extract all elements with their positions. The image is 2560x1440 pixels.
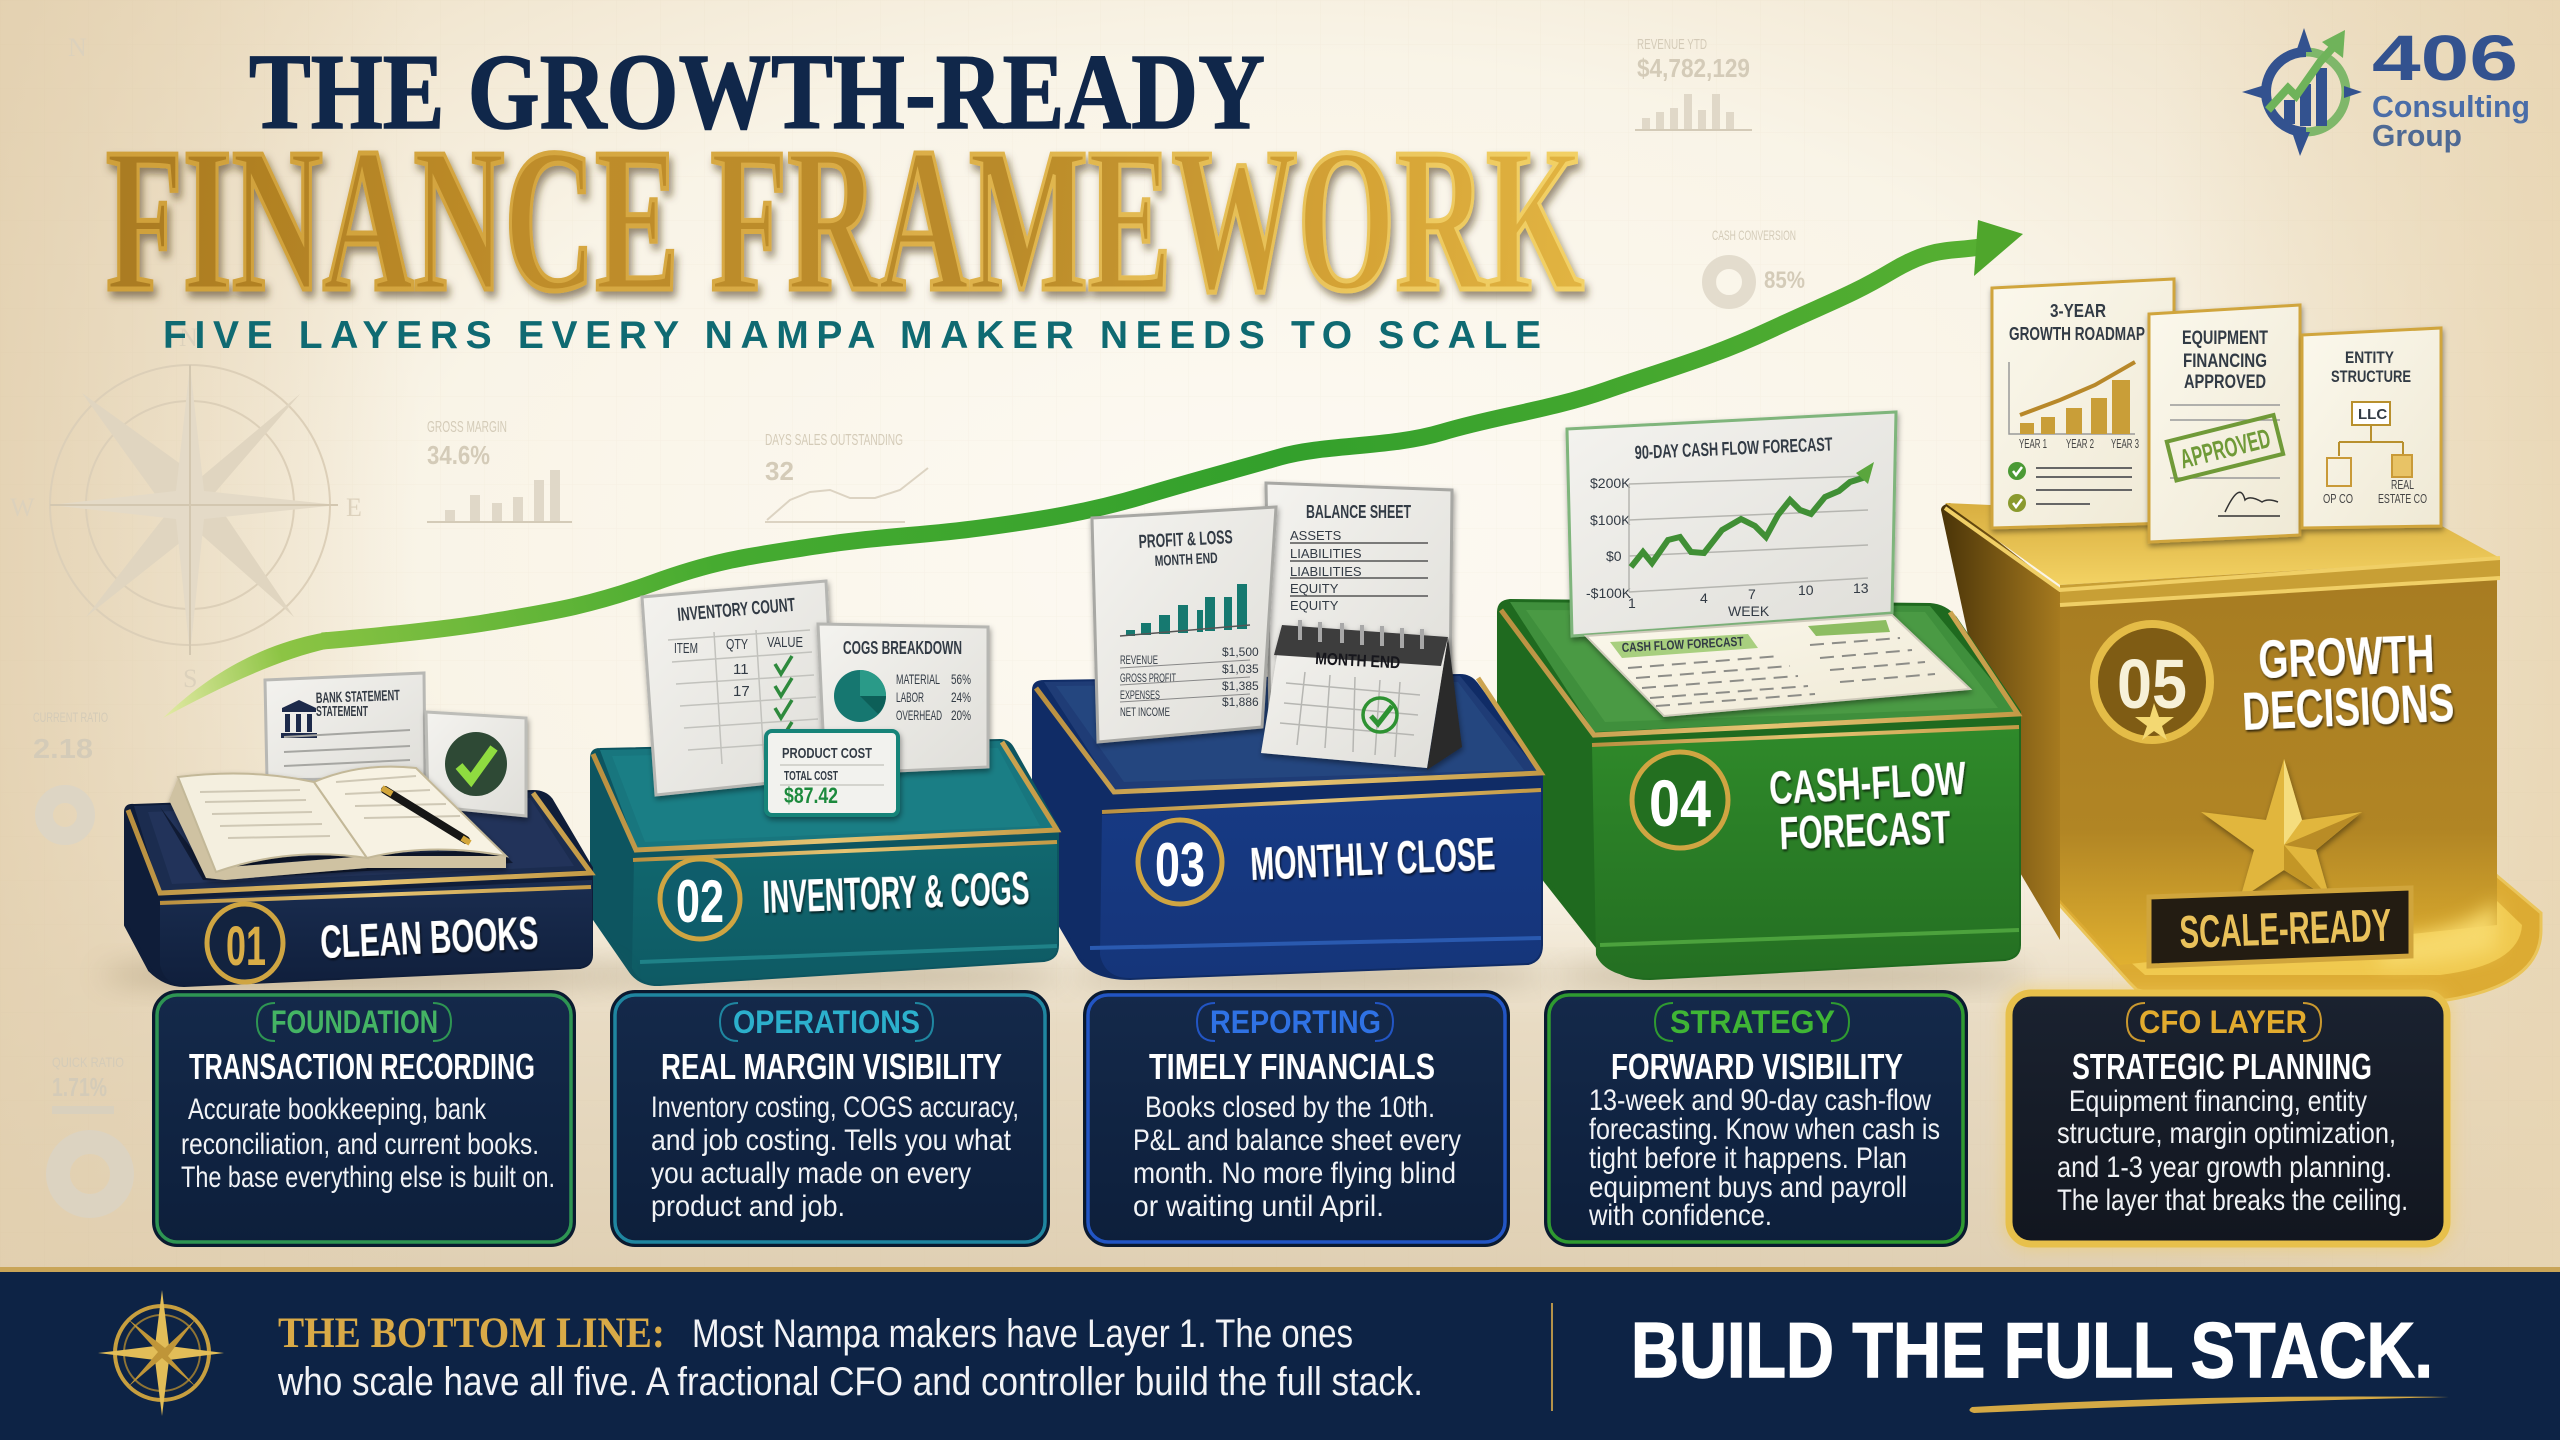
faint metric: cash conversion: [1709, 227, 1805, 302]
label: cash-flow forecast: CASH-FLOW: [1768, 752, 1968, 814]
heading: timely financials: TIMELY FINANCIALS: [1149, 1046, 1435, 1087]
card: cogs breakdown: 56%: [951, 671, 971, 687]
text block: strategy: [1588, 1084, 1940, 1232]
card: balance sheet: ASSETS: [1290, 528, 1342, 543]
icon: month-end calendar: MONTH END: [1315, 649, 1401, 672]
decorative compass rose: S: [183, 664, 197, 693]
icon: bank statement card: [265, 673, 425, 780]
layer 2 tin: inventory and cogs: [592, 581, 1065, 989]
decorative compass rose: N: [179, 323, 198, 352]
text block: operations: product and job.: [651, 1190, 845, 1223]
decorative compass rose: E: [346, 493, 362, 522]
badge 01: [207, 904, 283, 982]
tag: strategy: STRATEGY: [1670, 1004, 1835, 1040]
text block: cfo layer: The layer that breaks the ceiling.: [2057, 1184, 2408, 1217]
card: cogs breakdown: 24%: [951, 689, 971, 705]
faint metric: revenue ytd: REVENUE YTD: [1637, 36, 1707, 53]
text block: reporting: P&L and balance sheet every: [1133, 1124, 1461, 1157]
badge 05: [2094, 624, 2210, 740]
card: entity structure: STRUCTURE: [2331, 367, 2411, 386]
card: profit and loss: $1,886: [1222, 695, 1259, 709]
decorative compass rose: [10, 33, 362, 693]
card: profit and loss: $1,035: [1222, 662, 1259, 676]
icon: month-end calendar: [1261, 620, 1462, 770]
card: balance sheet: BALANCE SHEET: [1306, 502, 1411, 522]
text block: cfo layer: [2057, 1085, 2408, 1217]
heading: strategic planning: STRATEGIC PLANNING: [2072, 1046, 2372, 1087]
card: inventory count: [642, 581, 836, 795]
badge 02: 02: [676, 868, 724, 935]
text block: operations: and job costing. Tells you what: [651, 1124, 1012, 1157]
card: profit and loss: $1,500: [1222, 645, 1259, 659]
text block: strategy: with confidence.: [1588, 1199, 1772, 1232]
badge 03: [1138, 820, 1222, 904]
faint metric: gross margin: 34.6%: [427, 440, 490, 470]
tag: cfo layer: CFO LAYER: [2139, 1004, 2307, 1040]
faint metric: cash conversion: 85%: [1764, 267, 1805, 294]
card: 90-day cash flow forecast chart: 7: [1748, 586, 1756, 602]
icon: check tile: [426, 712, 526, 816]
badge 04: [1632, 752, 1728, 848]
logo: 406 Consulting Group: Consulting: [2372, 89, 2530, 124]
icon: gold compass: [98, 1290, 224, 1416]
growth arrow: [163, 220, 2023, 718]
icon: open ledger with pen: [169, 767, 506, 880]
faint metric: days sales outstanding: 32: [765, 456, 794, 486]
card: equipment financing approved: [2149, 305, 2300, 542]
plaque: scale-ready: [2149, 888, 2411, 966]
text block: cfo layer: Equipment financing, entity: [2069, 1085, 2367, 1118]
panel: operations card: [613, 993, 1047, 1244]
tag: operations: OPERATIONS: [733, 1004, 920, 1040]
panel: reporting card: [1086, 993, 1507, 1244]
card: entity structure: ENTITY: [2345, 348, 2395, 367]
decorative compass rose: N: [68, 33, 87, 62]
label: monthly close: MONTHLY CLOSE: [1249, 827, 1496, 890]
card: equipment financing approved: EQUIPMENT: [2182, 328, 2268, 349]
card: inventory count: 17: [733, 683, 750, 700]
card: inventory count: VALUE: [767, 634, 803, 651]
card: 90-day cash flow forecast chart: WEEK: [1728, 603, 1770, 619]
text block: foundation: Accurate bookkeeping, bank: [188, 1093, 487, 1126]
text block: foundation: The base everything else is built on.: [181, 1161, 555, 1194]
text block: operations: [651, 1091, 1019, 1223]
badge 02: [660, 859, 740, 939]
underline stroke: [1969, 1396, 2449, 1413]
faint metric: days sales outstanding: [765, 432, 928, 522]
text block: foundation: [181, 1093, 555, 1194]
faint metric: current ratio: CURRENT RATIO: [33, 709, 108, 725]
pedestal base: [2019, 860, 2541, 1000]
card: 90-day cash flow forecast chart: -$100K: [1586, 585, 1632, 601]
icon: bank statement card: STATEMENT: [316, 703, 368, 720]
card: cash flow forecast sheet: [1586, 615, 1970, 716]
title line 2: FINANCE FRAMEWORK: [106, 105, 1584, 334]
text block: operations: Inventory costing, COGS accuracy,: [651, 1091, 1019, 1124]
panel: strategy card: [1547, 993, 1965, 1244]
decorative compass rose: W: [10, 493, 35, 522]
card: entity structure: OP CO: [2323, 491, 2353, 506]
text: the bottom line: THE BOTTOM LINE:: [278, 1310, 665, 1357]
call to action: BUILD THE FULL STACK.: [1631, 1306, 2433, 1394]
icon: bank statement card: BANK STATEMENT: [316, 687, 400, 707]
panel: cfo layer card: [2005, 989, 2451, 1248]
faint metric: cash conversion: CASH CONVERSION: [1712, 227, 1796, 243]
label: clean books: CLEAN BOOKS: [319, 907, 539, 968]
card: 3-year growth roadmap: 3-YEAR: [2050, 301, 2106, 321]
faint metric: gross margin: GROSS MARGIN: [427, 419, 507, 436]
faint metric: current ratio: 2.18: [33, 733, 93, 764]
card: 3-year growth roadmap: YEAR 3: [2111, 436, 2139, 451]
card: 90-day cash flow forecast chart: $0: [1606, 548, 1622, 564]
faint metric: quick ratio: QUICK RATIO: [52, 1054, 124, 1070]
card: 90-day cash flow forecast chart: [1567, 412, 1896, 636]
text block: reporting: or waiting until April.: [1133, 1190, 1384, 1223]
card: inventory count: ITEM: [674, 640, 698, 657]
text: bottom line sentence one: Most Nampa makers have Layer 1. The ones: [692, 1312, 1353, 1356]
card: profit and loss: EXPENSES: [1120, 688, 1160, 702]
label: growth decisions: DECISIONS: [2241, 673, 2455, 742]
label: cash-flow forecast: [1768, 752, 1968, 859]
panel: bottom line band: [0, 1267, 2560, 1440]
label: cash-flow forecast: FORECAST: [1779, 801, 1951, 859]
panel: foundation card: [155, 993, 573, 1244]
card: inventory count: 11: [733, 661, 749, 678]
faint metric: current ratio: [33, 709, 108, 836]
tag: foundation: FOUNDATION: [271, 1004, 438, 1040]
card: profit and loss: MONTH END: [1154, 550, 1218, 570]
card: cogs breakdown: COGS BREAKDOWN: [843, 638, 962, 658]
card: 90-day cash flow forecast chart: 90-DAY CASH FLOW FORECAST: [1634, 434, 1833, 464]
label: growth decisions: [2241, 624, 2455, 742]
text block: cfo layer: structure, margin optimization,: [2057, 1117, 2396, 1150]
card: 3-year growth roadmap: [1992, 279, 2174, 528]
card: product cost: $87.42: [784, 783, 838, 808]
card: profit and loss: NET INCOME: [1120, 705, 1170, 719]
card: inventory count: QTY: [726, 636, 748, 653]
card: equipment financing approved: APPROVED: [2177, 423, 2273, 474]
logo: 406 Consulting Group: [2242, 22, 2530, 156]
faint metric: days sales outstanding: DAYS SALES OUTSTANDING: [765, 432, 903, 449]
card: 90-day cash flow forecast chart: 10: [1798, 582, 1814, 598]
card: balance sheet: EQUITY: [1290, 581, 1339, 596]
faint metric: revenue ytd: [1635, 36, 1752, 130]
card: entity structure: LLC: [2358, 406, 2387, 423]
heading: transaction recording: TRANSACTION RECORDING: [189, 1046, 535, 1087]
card: 90-day cash flow forecast chart: $100K: [1590, 512, 1631, 528]
badge 04: 04: [1649, 766, 1711, 840]
layer 4 tin: cash-flow forecast: [1499, 412, 2030, 989]
label: growth decisions: GROWTH: [2257, 624, 2435, 690]
text block: reporting: [1133, 1091, 1461, 1223]
card: balance sheet: LIABILITIES: [1290, 564, 1362, 579]
card: profit and loss: [1092, 507, 1276, 742]
card: equipment financing approved: APPROVED: [2184, 372, 2266, 393]
icon: gold star: [2201, 759, 2362, 899]
card: cogs breakdown: LABOR: [896, 689, 924, 705]
badge 05: 05: [2117, 645, 2187, 723]
card: entity structure: [2302, 328, 2441, 528]
card: profit and loss: $1,385: [1222, 679, 1259, 693]
faint metric: revenue ytd: $4,782,129: [1637, 53, 1750, 83]
faint metric: gross margin: [427, 419, 572, 522]
card: balance sheet: LIABILITIES: [1290, 546, 1362, 561]
card: 3-year growth roadmap: GROWTH ROADMAP: [2009, 324, 2145, 344]
card: entity structure: ESTATE CO: [2378, 491, 2427, 506]
logo: 406 Consulting Group: 406: [2372, 22, 2518, 94]
card: cogs breakdown: 20%: [951, 707, 971, 723]
card: product cost: [766, 731, 898, 815]
heading: real margin visibility: REAL MARGIN VISIBILITY: [661, 1046, 1002, 1087]
text block: operations: you actually made on every: [651, 1157, 971, 1190]
card: profit and loss: PROFIT & LOSS: [1138, 527, 1233, 553]
badge 03: 03: [1155, 831, 1205, 900]
badge 01: 01: [226, 914, 266, 977]
card: 3-year growth roadmap: YEAR 2: [2066, 436, 2094, 451]
text: bottom line sentence two: who scale have all five. A fractional CFO and controller build the full stack.: [277, 1360, 1423, 1404]
subtitle: FIVE LAYERS EVERY NAMPA MAKER NEEDS TO SCALE: [163, 314, 1541, 357]
logo: 406 Consulting Group: Group: [2372, 118, 2462, 153]
label: inventory and cogs: INVENTORY & COGS: [762, 862, 1030, 923]
card: 90-day cash flow forecast chart: 4: [1700, 590, 1708, 606]
text block: foundation: reconciliation, and current books.: [181, 1128, 539, 1161]
plaque: scale-ready: SCALE-READY: [2179, 899, 2392, 958]
card: profit and loss: GROSS PROFIT: [1120, 671, 1176, 685]
text block: strategy: tight before it happens. Plan: [1589, 1142, 1907, 1175]
card: 90-day cash flow forecast chart: $200K: [1590, 475, 1631, 491]
text block: reporting: Books closed by the 10th.: [1145, 1091, 1435, 1124]
layer 1 tin: clean books: [100, 673, 620, 991]
layer 5 pedestal: growth decisions: [1941, 279, 2541, 1000]
faint metric: quick ratio: 1.71%: [52, 1072, 107, 1102]
text block: strategy: 13-week and 90-day cash-flow: [1589, 1084, 1931, 1117]
card: 3-year growth roadmap: YEAR 1: [2019, 436, 2047, 451]
card: equipment financing approved: FINANCING: [2183, 351, 2267, 372]
card: entity structure: REAL: [2391, 477, 2414, 492]
text block: reporting: month. No more flying blind: [1133, 1157, 1456, 1190]
card: cash flow forecast sheet: CASH FLOW FORECAST: [1621, 634, 1744, 655]
card: product cost: PRODUCT COST: [782, 745, 872, 762]
card: cogs breakdown: [818, 624, 988, 774]
card: profit and loss: REVENUE: [1120, 653, 1158, 667]
tag: reporting: REPORTING: [1210, 1004, 1381, 1040]
card: cogs breakdown: MATERIAL: [896, 671, 940, 687]
text block: strategy: equipment buys and payroll: [1589, 1171, 1907, 1204]
title line 1: THE GROWTH-READY: [249, 33, 1265, 152]
card: inventory count: INVENTORY COUNT: [677, 595, 796, 626]
faint metric: quick ratio: [52, 1054, 124, 1206]
card: product cost: TOTAL COST: [784, 768, 838, 783]
card: 90-day cash flow forecast chart: 1: [1628, 595, 1636, 611]
layer 3 tin: monthly close: [1034, 483, 1550, 989]
card: balance sheet: EQUITY: [1290, 598, 1339, 613]
card: cogs breakdown: OVERHEAD: [896, 707, 942, 723]
text block: strategy: forecasting. Know when cash is: [1589, 1113, 1940, 1146]
heading: forward visibility: FORWARD VISIBILITY: [1611, 1046, 1903, 1087]
card: balance sheet: [1266, 483, 1452, 720]
card: 90-day cash flow forecast chart: 13: [1853, 580, 1869, 596]
text block: cfo layer: and 1-3 year growth planning.: [2057, 1151, 2392, 1184]
